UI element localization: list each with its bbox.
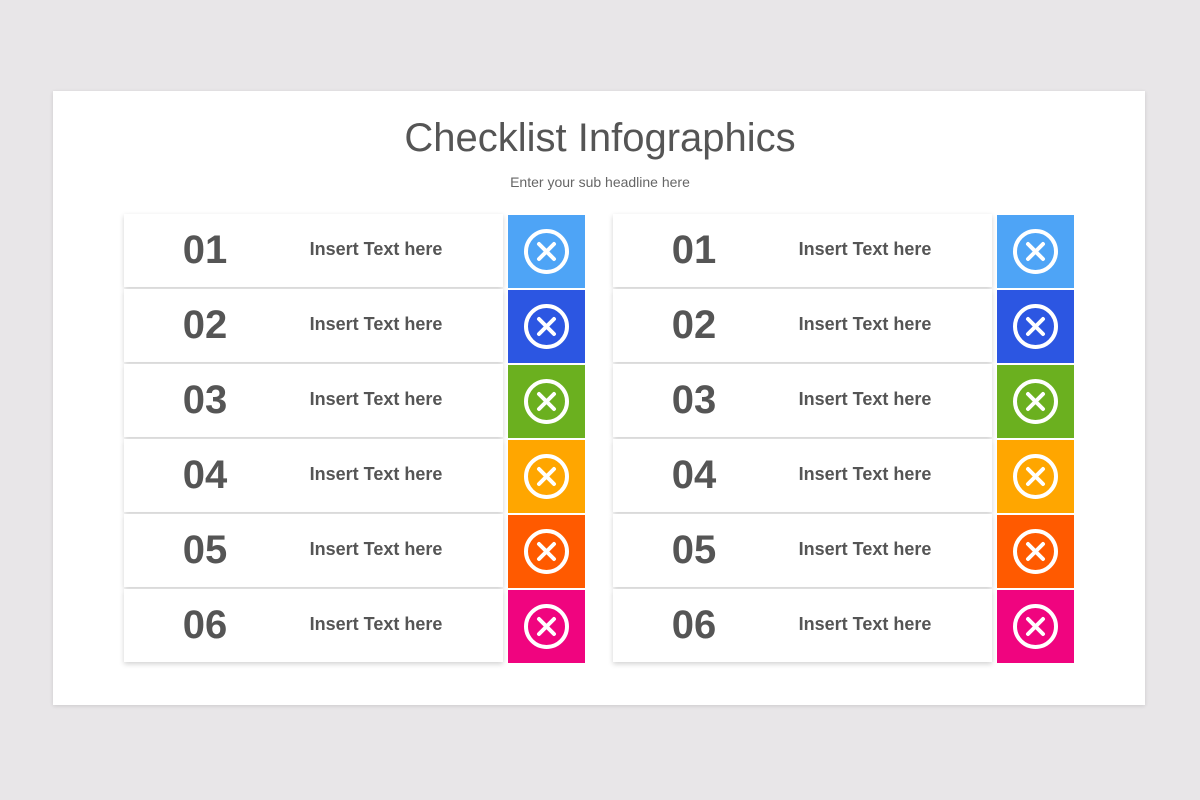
icon box 3 right <box>997 365 1074 438</box>
left column row 1 <box>124 214 503 287</box>
right column row 2: 02 <box>672 303 716 347</box>
right column row 1: Insert Text here <box>799 239 931 259</box>
left column row 6: 06 <box>183 603 227 647</box>
subtitle: Enter your sub headline here <box>510 174 690 190</box>
right column row 4: Insert Text here <box>799 464 931 484</box>
right column row 6: Insert Text here <box>799 614 931 634</box>
right column row 2: Insert Text here <box>799 314 931 334</box>
left column row 4 <box>124 439 503 512</box>
right column row 6: 06 <box>672 603 716 647</box>
left column row 5: 05 <box>183 528 227 572</box>
right column row 5: 05 <box>672 528 716 572</box>
left column row 6 <box>124 589 503 662</box>
icon box 2 left <box>508 290 585 363</box>
right column row 2 <box>613 289 992 362</box>
icon box 2 right <box>997 290 1074 363</box>
left column row 1: Insert Text here <box>310 239 442 259</box>
right column row 3: 03 <box>672 378 716 422</box>
icon box 5 right <box>997 515 1074 588</box>
icon box 3 left <box>508 365 585 438</box>
right column row 4: 04 <box>672 453 716 497</box>
right column row 5: Insert Text here <box>799 539 931 559</box>
right column row 1: 01 <box>672 228 716 272</box>
right column row 3: Insert Text here <box>799 389 931 409</box>
left column row 5 <box>124 514 503 587</box>
icon box 6 left <box>508 590 585 663</box>
left column row 2: Insert Text here <box>310 314 442 334</box>
icon box 4 right <box>997 440 1074 513</box>
slide panel <box>53 91 1145 705</box>
left column row 4: 04 <box>183 453 227 497</box>
title: Checklist Infographics <box>404 116 796 160</box>
icon box 5 left <box>508 515 585 588</box>
right column row 1 <box>613 214 992 287</box>
right column row 3 <box>613 364 992 437</box>
left column row 6: Insert Text here <box>310 614 442 634</box>
right column row 4 <box>613 439 992 512</box>
left column row 5: Insert Text here <box>310 539 442 559</box>
right column row 6 <box>613 589 992 662</box>
icon box 1 left <box>508 215 585 288</box>
left column row 3: 03 <box>183 378 227 422</box>
icon box 4 left <box>508 440 585 513</box>
left column row 3 <box>124 364 503 437</box>
right column row 5 <box>613 514 992 587</box>
left column row 4: Insert Text here <box>310 464 442 484</box>
left column row 2: 02 <box>183 303 227 347</box>
left column row 1: 01 <box>183 228 227 272</box>
left column row 2 <box>124 289 503 362</box>
icon box 6 right <box>997 590 1074 663</box>
left column row 3: Insert Text here <box>310 389 442 409</box>
icon box 1 right <box>997 215 1074 288</box>
